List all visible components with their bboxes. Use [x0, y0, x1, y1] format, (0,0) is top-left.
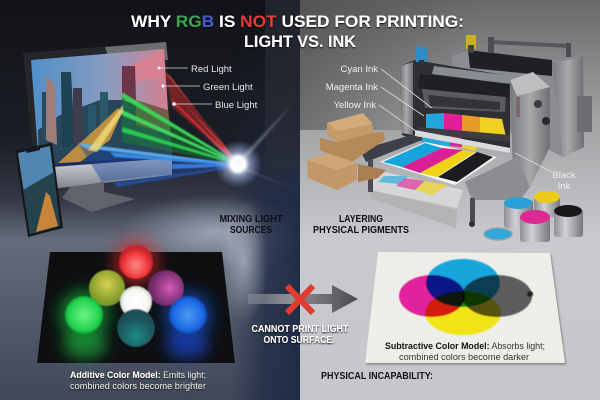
- icon: red cross: [287, 286, 313, 313]
- paint cans: [484, 191, 583, 242]
- printed sheet: [380, 142, 497, 185]
- additive caption: Additive Color Model: Emits light;: [70, 370, 206, 381]
- colour roller: [426, 113, 506, 138]
- subtractive caption: Subtractive Color Model: Absorbs light;: [385, 341, 545, 352]
- paper stack: [370, 172, 463, 228]
- heading: layering physical pigments: [313, 214, 409, 236]
- callouts: ink labels: Black: [552, 170, 576, 181]
- callouts: light labels: Red Light: [191, 64, 232, 75]
- callouts: ink labels: Cyan Ink: [340, 64, 378, 75]
- subtractive caption: [385, 341, 545, 363]
- light beams: [78, 72, 238, 187]
- front unit: [400, 47, 550, 187]
- additive caption: [70, 370, 207, 392]
- heading: mixing light sources: MIXING LIGHT: [220, 214, 282, 225]
- heading: layering physical pigments: LAYERING: [339, 214, 383, 225]
- blocked message: [252, 324, 348, 346]
- callouts: ink labels: Yellow Ink: [334, 100, 376, 111]
- additive caption: combined colors become brighter: [70, 381, 207, 392]
- lower roller: [418, 127, 510, 151]
- blocked message: CANNOT PRINT LIGHT: [252, 324, 348, 335]
- smartphone: [15, 143, 63, 237]
- arrow with red cross: [248, 285, 358, 313]
- callouts: light labels: Green Light: [203, 82, 253, 93]
- coloured glows: [58, 238, 214, 359]
- heading: mixing light sources: [220, 214, 282, 236]
- heading: layering physical pigments: PHYSICAL PIGMENTS: [313, 225, 409, 236]
- back unit: [452, 35, 592, 157]
- callouts: ink labels: Magenta Ink: [326, 82, 378, 93]
- monitor screen: [31, 49, 172, 167]
- cardboard boxes: [307, 113, 386, 190]
- blocked message: ONTO SURFACE.: [264, 335, 335, 346]
- panel: light side background: [0, 0, 310, 400]
- venn diagram: [399, 259, 533, 335]
- monitor: [23, 42, 173, 212]
- printing press: [326, 35, 592, 228]
- subtractive caption: combined colors become darker: [399, 352, 530, 363]
- heading: physical incapability: PHYSICAL INCAPABILITY:: [321, 371, 433, 382]
- light spheres: [65, 245, 207, 347]
- heading: mixing light sources: SOURCES: [230, 225, 272, 236]
- panel: ink side background: [300, 0, 600, 400]
- callouts: light labels: Blue Light: [215, 100, 258, 111]
- callouts: ink labels: Ink: [558, 181, 571, 192]
- press base: [465, 157, 530, 200]
- title: [131, 12, 464, 51]
- callouts: light labels: [158, 64, 258, 111]
- additive colour panel: [37, 238, 235, 363]
- callouts: ink labels: [326, 64, 576, 192]
- press frame: [360, 130, 510, 227]
- title: WHY RGB IS NOT USED FOR PRINTING:: [131, 12, 464, 31]
- light source flare: [205, 105, 296, 190]
- subtractive colour panel: [365, 252, 566, 364]
- title: LIGHT VS. INK: [244, 32, 357, 51]
